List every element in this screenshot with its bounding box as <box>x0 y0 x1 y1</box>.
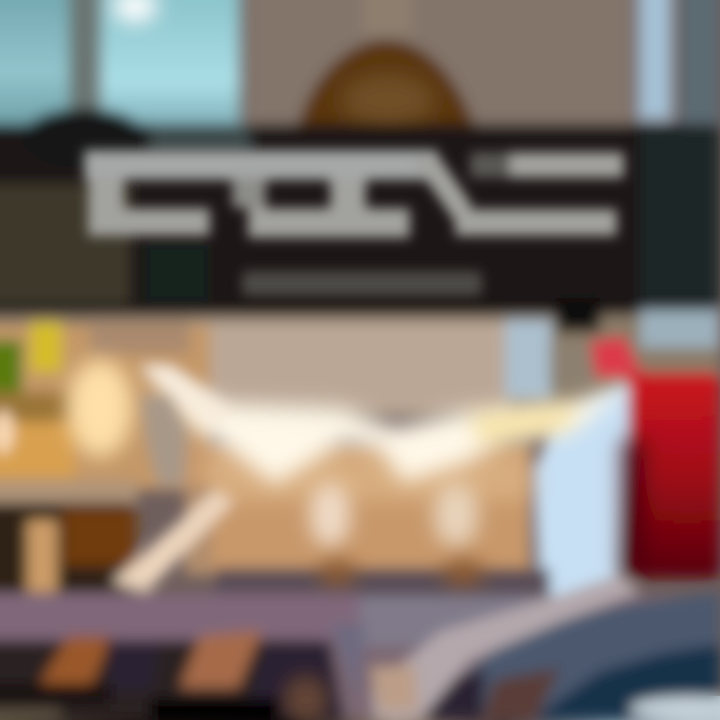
green plant <box>0 340 22 392</box>
top row <box>84 150 438 180</box>
cream highlight <box>68 360 132 456</box>
lamp inner <box>342 74 434 126</box>
pale diagonal stripe <box>372 574 640 720</box>
plaid blanket <box>0 574 720 720</box>
brown under plant <box>0 392 70 422</box>
wooden table <box>0 480 138 592</box>
lilac centre <box>330 625 366 700</box>
hanging lamp dome <box>296 40 478 135</box>
lamp stem <box>362 0 412 35</box>
orange lower <box>0 422 75 478</box>
red pillow <box>590 336 720 578</box>
bottom edge colour strip <box>0 696 720 720</box>
dark stripe beside tan <box>418 668 485 720</box>
right lilac <box>340 596 580 646</box>
window right pane <box>100 0 240 130</box>
cat flank <box>186 486 212 574</box>
top background: window and curtain <box>0 0 720 135</box>
blurred title heading <box>84 150 624 238</box>
grey shadow beneath cat <box>215 568 550 598</box>
dark hump left <box>22 108 146 168</box>
pale rim <box>140 366 232 425</box>
table leg <box>27 520 57 592</box>
dark green patch <box>146 245 208 301</box>
yellow highlight <box>470 404 580 444</box>
teal tint behind heading <box>150 124 250 152</box>
brown stripe lower <box>482 668 560 720</box>
banner left olive panel <box>0 184 130 304</box>
right window strip <box>638 0 672 120</box>
red pillow shaded edge <box>622 440 644 574</box>
left dark base <box>0 640 320 720</box>
brown shoulder <box>90 322 190 354</box>
pale spot <box>0 410 14 454</box>
lilac band left <box>0 594 360 640</box>
dark gap <box>556 298 600 332</box>
blue pillow <box>534 382 632 596</box>
window mullion <box>69 0 97 110</box>
tan stripes <box>40 636 112 684</box>
table shadow <box>62 508 136 566</box>
pale corner <box>630 696 720 720</box>
right dark edge <box>640 128 720 304</box>
pale blue back pillow <box>505 320 551 398</box>
front leg <box>112 490 234 592</box>
blurred subtitle <box>242 271 482 296</box>
cat ear <box>140 394 188 486</box>
yellow leaf <box>30 322 62 372</box>
dim link <box>470 152 512 178</box>
white fur highlight <box>146 372 634 484</box>
brown paws <box>319 557 483 587</box>
lighter peach top <box>205 455 530 500</box>
left orange cat shoulder and plant <box>0 322 210 490</box>
window gap right <box>640 310 720 348</box>
curtain <box>245 0 633 130</box>
bed headboard and back cushions <box>0 298 720 416</box>
dark title banner <box>0 108 720 314</box>
dark stripes <box>245 640 345 720</box>
white fur patches <box>310 483 350 547</box>
dark navy right blanket <box>420 592 720 720</box>
tan stripe lower <box>370 665 418 712</box>
right dark wall <box>680 0 720 130</box>
cat body <box>140 366 634 575</box>
window bright spot <box>113 0 157 22</box>
